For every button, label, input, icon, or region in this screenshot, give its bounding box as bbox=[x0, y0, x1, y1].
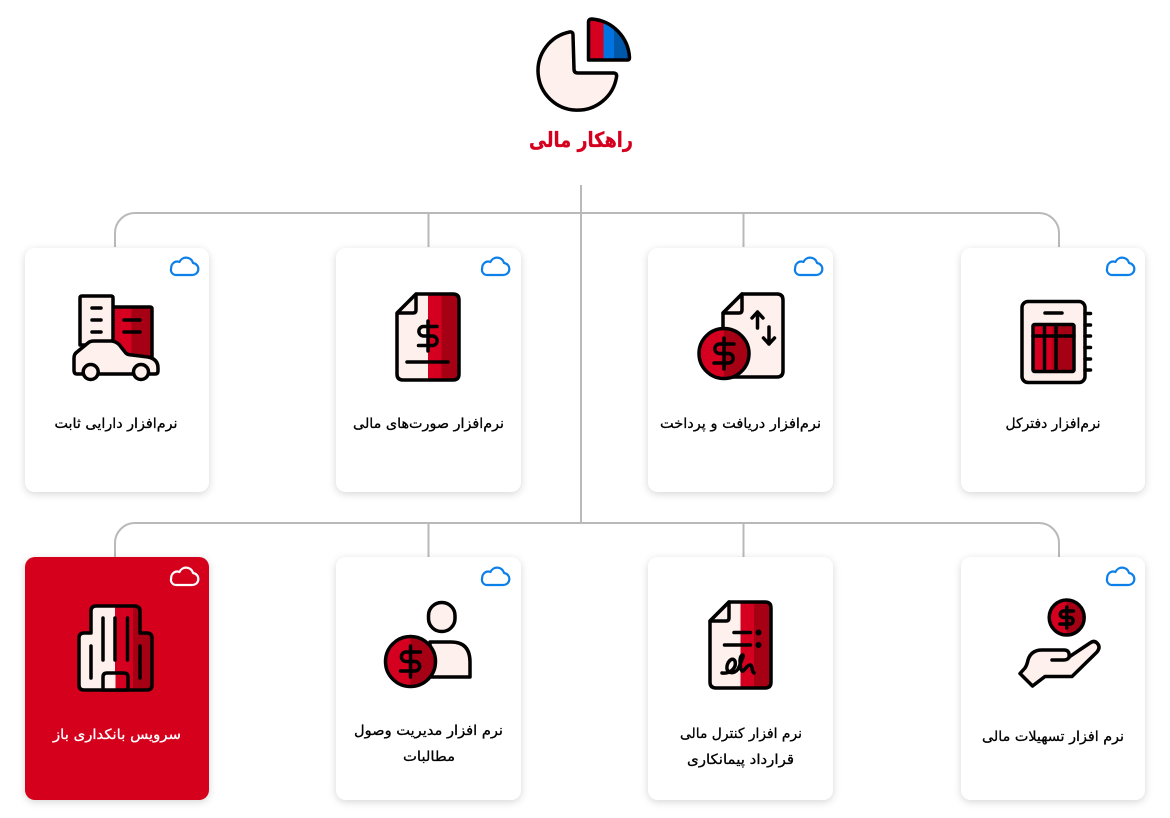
label: مطالبات bbox=[403, 749, 455, 765]
icon: cloud bbox=[795, 258, 822, 275]
panel: general ledger software bbox=[961, 248, 1145, 492]
icon: cloud bbox=[171, 568, 198, 585]
icon: document with coin and arrows bbox=[699, 294, 783, 378]
card background bbox=[25, 248, 209, 492]
label: نرم افزار تسهیلات مالی bbox=[982, 729, 1124, 745]
icon: cloud bbox=[171, 258, 198, 275]
label: نرم افزار کنترل مالی bbox=[680, 726, 802, 742]
panel: fixed assets software bbox=[25, 248, 209, 492]
panel: open banking service bbox=[25, 557, 209, 800]
icon: cloud bbox=[1107, 258, 1134, 275]
card background bbox=[961, 557, 1145, 800]
card background bbox=[961, 248, 1145, 492]
icon: document with dollar bbox=[397, 294, 459, 380]
icon: ledger notebook bbox=[1022, 302, 1090, 382]
card background bbox=[25, 557, 209, 800]
title: راهکار مالی bbox=[529, 128, 633, 152]
card background bbox=[648, 557, 833, 800]
panel: financial facilities software bbox=[961, 557, 1145, 800]
connector lines bbox=[115, 185, 1059, 557]
card background bbox=[648, 248, 833, 492]
icon: cloud bbox=[482, 568, 509, 585]
icon: signed contract bbox=[710, 602, 771, 688]
label: نرم‌افزار صورت‌های مالی bbox=[353, 416, 504, 432]
icon: person with coin bbox=[386, 602, 470, 686]
card background bbox=[336, 248, 521, 492]
panel: receivables management software bbox=[336, 557, 521, 800]
icon: buildings and car bbox=[74, 296, 158, 380]
label: نرم افزار مدیریت وصول bbox=[354, 723, 503, 739]
panel: payments and receipts software bbox=[648, 248, 833, 492]
label: قرارداد پیمانکاری bbox=[687, 752, 794, 768]
label bbox=[354, 723, 503, 765]
panel: contract financial control software bbox=[648, 557, 833, 800]
icon: hand with coin bbox=[1020, 600, 1099, 686]
icon: cloud bbox=[482, 258, 509, 275]
label: نرم‌افزار دارایی ثابت bbox=[54, 416, 178, 432]
icon: pie chart bbox=[538, 19, 630, 110]
card background bbox=[336, 557, 521, 800]
panel: financial statements software bbox=[336, 248, 521, 492]
label: نرم‌افزار دفترکل bbox=[1006, 416, 1100, 432]
icon: cloud bbox=[1107, 568, 1134, 585]
label bbox=[680, 726, 802, 768]
label: سرویس بانکداری باز bbox=[52, 727, 181, 743]
icon: bank building bbox=[79, 606, 152, 690]
label: نرم‌افزار دریافت و پرداخت bbox=[660, 416, 821, 432]
